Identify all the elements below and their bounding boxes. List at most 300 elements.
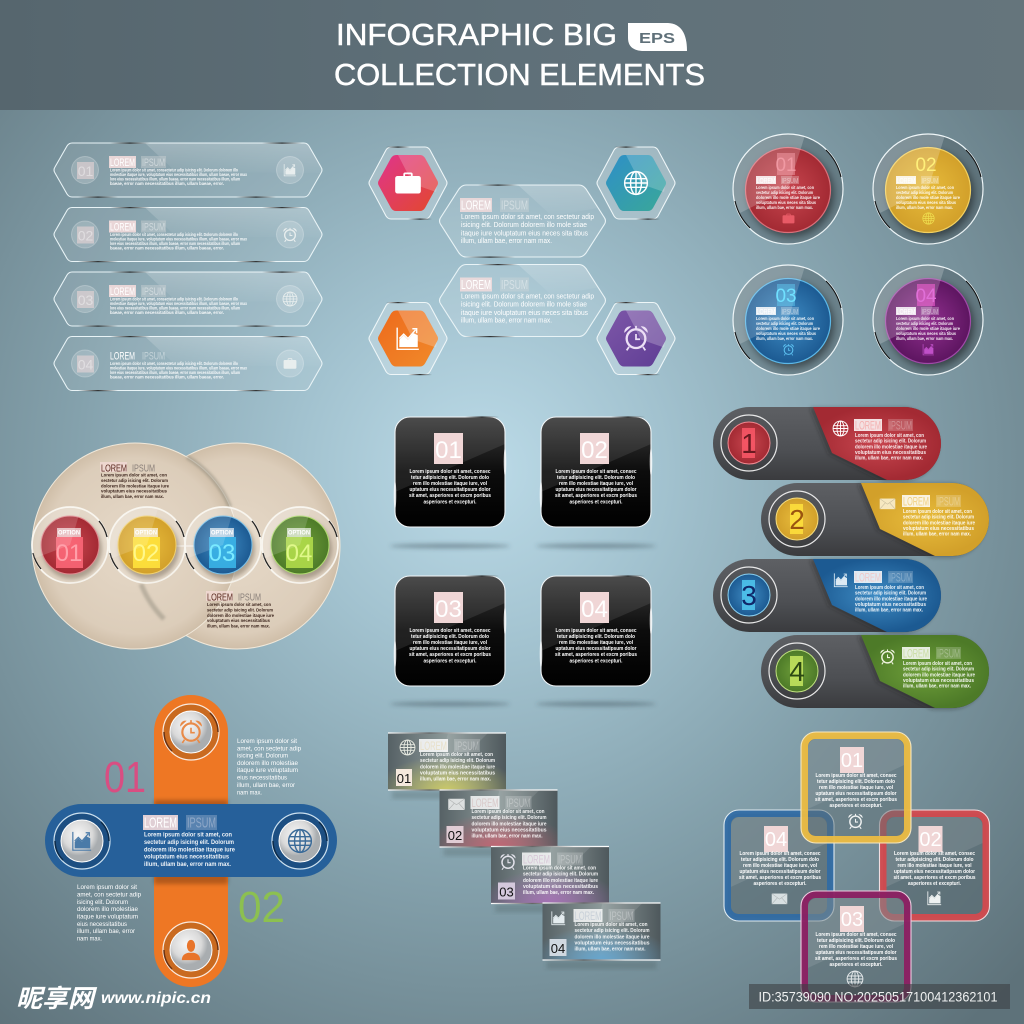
panel: hexagons [369,146,675,375]
frame 03 purple [801,891,911,1002]
pill 2 yellow: illum, ullam bae, error nam max. [903,532,972,538]
frame 04 blue: 04 [765,829,787,851]
disc text upper: LOREM [101,462,127,474]
strip 03: IPSUM [558,852,582,866]
strip 02: sectetur adip isicing elit. Dolorum [472,815,547,821]
frame 04 blue: asperiores et excepturi. [754,881,807,887]
card 01: Lorem ipsum dolor sit amet, consec [410,469,491,475]
glass bar 03: IPSUM [142,286,165,298]
disc text lower: dolorem illo molestiae itaque iure [207,613,274,619]
glass circle 03 blue: 03 [775,286,797,307]
number 01: 01 [104,753,146,802]
glass circle 03 blue: voluptatum eius neces sita tibus [756,331,816,337]
strip 04 [542,903,660,969]
frame 03 purple: sit amet, asperiores et excm poribus [815,956,897,962]
glass circle 01 red [728,129,843,244]
glass bar 02: molestiae itaque iure, voluptatum eius necessitatibus illum, ullam baeae, error max [110,236,247,242]
card 04: 04 [581,596,608,623]
option circle 04: OPTION [288,530,310,536]
text hexagon lower [440,264,606,337]
side text right: eius necessitatibus [237,774,288,782]
pill 1 red: voluptatum eius necessitatibus [855,450,926,456]
frame 01 yellow: rem illo molestiae itaque iure, vol [819,785,893,791]
side text right [237,738,301,796]
cross centre text: dolorem illo molestiae itaque iure [144,846,235,854]
text hexagon lower: IPSUM [501,277,528,292]
pill 4 green: illum, ullam bae, error nam max. [903,684,972,690]
strip 03: 03 [499,884,514,900]
glass bar 02: lore eius necessitatibus illum, ullam baeae, error nam necessitatibus illum, ullam [110,241,240,246]
glass circle 03 blue: IPSUM [782,307,798,316]
glass bar 04: 04 [78,356,93,372]
glass circle 03 blue: LOREM [756,307,776,316]
pill 3 blue [713,559,941,633]
glass bar 03: LOREM [110,286,135,298]
frame 03 purple: 03 [841,909,863,931]
pill 4 green: 4 [789,656,805,687]
frame 04 blue [724,810,834,921]
card 01 [394,416,506,527]
glass circle 01 red: sectetur adip isicing elit. Dolorum [756,190,813,196]
frame 01 yellow: uptatum eius necessitatipsum dolor [816,791,896,797]
glass circle 02 yellow [868,129,983,244]
glass circle 03 blue: illum, ullam bae, error nam max. [756,336,813,342]
glass circle 03 blue [728,260,843,375]
strip 02: illum, ullam bae, error nam max. [472,834,543,840]
cross centre text: sectetur adip isicing elit. Dolorum [144,839,234,846]
disc text lower [206,591,274,630]
button: bottom person [163,922,219,978]
text hexagon lower: illum, ullam bae, error nam max. [461,318,552,324]
frame 03 purple: asperiores et excepturi. [830,962,883,968]
pill 3 blue: sectetur adip isicing elit. Dolorum [855,590,926,596]
pill 2 yellow: dolorem illo molestiae itaque iure [903,520,975,526]
card 01: rem illo molestiae itaque iure, vol [413,481,487,487]
glass bar 01: Lorem ipsum dolor sit amet, consectetur adip isicing elit. Dolorum dolorem illo [110,168,238,172]
side text left: nam max. [77,936,102,942]
glass bar 02: LOREM [110,222,135,234]
side text left: illum, ullam bae, error [77,928,136,935]
frame 02 red: tetur adipisicing elit. Dolorum dolo [896,857,974,863]
strip 02: dolorem illo molestiae itaque iure [472,822,546,828]
option circle 03 [183,505,261,583]
card 03: asperiores et excepturi. [424,658,477,664]
side text left: Lorem ipsum dolor sit [77,884,137,891]
strip 02: LOREM [472,796,498,810]
frame 02 red: sit amet, asperiores et excm poribus [894,875,976,881]
card 04: tetur adipisicing elit. Dolorum dolo [557,634,636,640]
strip 04: LOREM [574,909,602,923]
glass bar 03: 03 [78,292,93,308]
orange vertical bar [154,695,228,987]
hexagon icon: chart [369,302,447,375]
glass bar 02: baeae, error nam necessitatibus illum, ullam baeae, error. [110,246,224,250]
glass bar 01: LOREM [110,157,135,169]
glass circle 03 blue: Lorem ipsum dolor sit amet, con [756,316,814,322]
card 02: sit amet, asperiores et excm poribus [555,493,637,499]
frame 04 blue: sit amet, asperiores et excm poribus [739,875,821,881]
disc right [134,443,340,649]
text hexagon upper: LOREM [461,198,491,212]
strip 03 [491,846,609,912]
disc text upper: IPSUM [132,462,155,474]
disc text upper [100,462,169,500]
glass circle 03 blue: dolorem illo mole stiae itaque iure [756,326,820,332]
panel: overlapping beige discs [30,443,340,649]
panel: glass bars [54,142,322,391]
pill 1 red: LOREM [855,420,881,432]
option circle 02: OPTION [135,530,157,536]
glass circle 04 purple: voluptatum eius neces sita tibus [896,331,956,337]
EPS badge [628,23,687,51]
option circle 03: 03 [209,540,235,567]
glass circle 04 purple: dolorem illo mole stiae itaque iure [896,326,960,332]
disc text upper: sectetur adip isicing elit. Dolorum [101,478,168,484]
text hexagon upper: itaque iure voluptatum eius neces sita tibus [461,230,588,238]
glass circle 01 red: dolorem illo mole stiae itaque iure [756,195,820,201]
glass circle 04 purple: sectetur adip isicing elit. Dolorum [896,321,953,327]
watermark id bar: ID:35739090 NO:20250517100412362101 [758,990,998,1004]
hexagon icon: globe [597,146,675,220]
frame 04 blue: uptatum eius necessitatipsum dolor [740,869,820,875]
card 02: tetur adipisicing elit. Dolorum dolo [557,475,636,481]
button: right globe [272,813,328,869]
cross centre text: LOREM [144,816,177,832]
strip 01: 01 [397,771,411,786]
card 01: uptatum eius necessitatipsum dolor [410,487,490,493]
pill 1 red: dolorem illo molestiae itaque iure [855,444,927,450]
button: top clock [163,704,219,760]
side text left: dolorem illo molestiae [77,906,138,913]
frame 02 red: asperiores et excepturi. [908,881,961,887]
disc left [32,443,238,649]
pill 1 red [713,407,941,481]
pill 4 green: IPSUM [937,648,960,660]
glass circle 04 purple: LOREM [896,307,916,316]
side text right: nam max. [237,790,262,796]
panel: glass circles [728,129,983,375]
pill 1 red: Lorem ipsum dolor sit amet, con [855,433,924,439]
frame 01 yellow: sit amet, asperiores et excm poribus [815,797,897,803]
glass circle 04 purple: IPSUM [922,307,938,316]
glass circle 04 purple: Lorem ipsum dolor sit amet, con [896,316,954,322]
frame 04 blue: rem illo molestiae itaque iure, vol [743,863,817,869]
card 03: Lorem ipsum dolor sit amet, consec [410,628,491,634]
blue bar shadow [154,800,228,884]
glass bar 04: lore eius necessitatibus illum, ullam baeae, error nam necessitatibus illum, ullam [110,370,240,375]
strip 02: IPSUM [506,796,530,810]
strip 04: IPSUM [610,909,634,923]
card 02: uptatum eius necessitatipsum dolor [556,487,636,493]
text hexagon upper: IPSUM [501,198,528,212]
pill 3 blue: illum, ullam bae, error nam max. [855,608,924,614]
frame 02 red: Lorem ipsum dolor sit amet, consec [894,851,975,857]
pill 4 green: voluptatum eius necessitatibus [903,678,974,684]
cross centre text: illum, ullam bae, error nam max. [144,861,231,868]
pill 1 red: IPSUM [889,420,912,432]
glass bar 04: IPSUM [142,350,165,362]
glass bar 04: molestiae itaque iure, voluptatum eius necessitatibus illum, ullam baeae, error max [110,366,247,370]
pill 2 yellow: voluptatum eius necessitatibus [903,526,974,532]
panel: stepped glass strips [388,733,660,969]
disc text upper: dolorem illo molestiae itaque iure [101,484,169,490]
disc text lower: IPSUM [238,592,261,604]
glass circle 04 purple: 04 [915,286,937,307]
panel: orange and blue cross [45,695,337,987]
pill 2 yellow: IPSUM [937,496,960,508]
card 02: asperiores et excepturi. [570,500,623,506]
frame 01 yellow: tetur adipisicing elit. Dolorum dolo [817,779,896,785]
strip 01: LOREM [420,739,447,753]
glass circle 02 yellow: Lorem ipsum dolor sit amet, con [896,185,954,191]
title: COLLECTION ELEMENTS [334,57,705,92]
frame 01 yellow: Lorem ipsum dolor sit amet, consec [816,773,897,779]
pill 2 yellow: LOREM [903,496,929,508]
card 03: uptatum eius necessitatipsum dolor [410,646,490,652]
frame 03 purple: uptatum eius necessitatipsum dolor [816,950,896,956]
pill 1 red: 1 [741,428,757,459]
glass bar 04: Lorem ipsum dolor sit amet, consectetur adip isicing elit. Dolorum dolorem illo [110,361,238,366]
glass circle 01 red: 01 [775,155,797,176]
frame 03 purple: rem illo molestiae itaque iure, vol [819,944,893,950]
option circle 01: 01 [56,540,82,567]
side text right: itaque iure voluptatum [237,767,298,774]
card 04: sit amet, asperiores et excm poribus [555,652,637,658]
glass bar 01: molestiae itaque iure, voluptatum eius necessitatibus illum, ullam baeae, error max [110,172,247,177]
glass circle 02 yellow: IPSUM [922,176,938,185]
strip 01: IPSUM [455,739,479,753]
overlap arc lower [141,584,164,619]
pill 3 blue: voluptatum eius necessitatibus [855,602,926,608]
card 03: tetur adipisicing elit. Dolorum dolo [411,634,490,640]
strip 01: Lorem ipsum dolor sit amet, con [420,752,494,758]
strip 01: dolorem illo molestiae itaque iure [420,764,495,770]
watermark logo: 昵享网 [16,985,98,1013]
card 04: asperiores et excepturi. [570,658,623,664]
side text left: eius necessitatibus [77,921,128,928]
frame 02 red [880,810,990,921]
option circle 02 [107,505,185,583]
pill 2 yellow [761,483,989,557]
card 04: rem illo molestiae itaque iure, vol [559,640,633,646]
pill 2 yellow: 2 [789,504,805,535]
pill 3 blue: dolorem illo molestiae itaque iure [855,596,927,602]
card 02: Lorem ipsum dolor sit amet, consec [556,469,637,475]
pill 3 blue: LOREM [855,572,881,584]
number 02: 02 [238,883,285,932]
option circle 02: 02 [133,540,159,567]
glass circle 01 red: IPSUM [782,176,798,185]
strip 04: dolorem illo molestiae itaque iure [574,934,650,940]
glass bar 01 [54,142,322,198]
frame 02 red: rem illo molestiae itaque iure, vol [898,863,972,869]
option circle 01: OPTION [58,530,80,536]
strip 02: Lorem ipsum dolor sit amet, con [472,809,545,815]
text hexagon upper [440,184,606,258]
disc text upper: illum, ullam bae, error nam max. [101,494,164,500]
card 02 [540,416,652,527]
glass circle 02 yellow: voluptatum eius neces sita tibus [896,200,956,206]
card 03 [394,575,506,686]
text hexagon upper: isicing elit. Dolorum dolorem illo mole stiae [461,222,587,229]
disc text lower: sectetur adip isicing elit. Dolorum [207,608,273,614]
frame 04 blue: Lorem ipsum dolor sit amet, consec [740,851,821,857]
title: INFOGRAPHIC BIG [336,17,617,52]
frame 02 red: 02 [919,829,942,851]
side text left: isicing elit. Dolorum [77,899,128,906]
EPS badge: EPS [639,30,675,47]
card 03: rem illo molestiae itaque iure, vol [413,640,487,646]
watermark logo [16,985,211,1013]
glass bar 02: IPSUM [142,222,165,234]
glass bar 03: Lorem ipsum dolor sit amet, consectetur adip isicing elit. Dolorum dolorem illo [110,296,238,302]
frame 03 purple: Lorem ipsum dolor sit amet, consec [816,932,897,938]
glass circle 02 yellow: illum, ullam bae, error nam max. [896,205,953,211]
side text right: amet, con sectetur adip [237,746,301,752]
overlap arc upper [187,457,230,507]
card 01: 01 [435,437,462,464]
connector line [176,546,194,547]
cross centre text: voluptatum eius necessitatibus [144,854,229,860]
text hexagon upper: illum, ullam bae, error nam max. [461,238,552,245]
disc text lower: Lorem ipsum dolor sit amet, con [207,602,271,608]
panel: number pills [713,407,989,709]
pill 3 blue: IPSUM [889,572,912,584]
pill 4 green: LOREM [903,648,929,660]
strip 02 [440,790,558,856]
card 03: 03 [435,596,462,623]
strip 04: 04 [551,941,565,956]
strip 01 [388,733,506,799]
pill 4 green [761,635,989,709]
hexagon icon: alarm clock [597,302,675,375]
watermark id bar [749,984,1010,1009]
option circle 04 [260,505,338,583]
strip 01: illum, ullam bae, error nam max. [420,776,491,782]
strip 02: 02 [448,828,462,843]
side text left [77,884,141,942]
glass bar 04 [54,336,322,391]
blue horizontal bar [45,804,337,877]
strip 04: Lorem ipsum dolor sit amet, con [574,922,648,928]
watermark logo: www.nipic.cn [101,990,211,1007]
panel: black cards [390,416,656,706]
card 03: sit amet, asperiores et excm poribus [409,652,491,658]
glass circle 02 yellow: sectetur adip isicing elit. Dolorum [896,190,953,196]
glass bar 03: lore eius necessitatibus illum, ullam baeae, error nam necessitatibus illum, ullam [110,306,240,310]
frame 01 yellow: asperiores et excepturi. [830,803,883,809]
pill 1 red: sectetur adip isicing elit. Dolorum [855,438,926,444]
strip 01: voluptatum eius necessitatibus [420,770,495,776]
glass bar 02: Lorem ipsum dolor sit amet, consectetur adip isicing elit. Dolorum dolorem illo [110,232,238,237]
glass circle 01 red: voluptatum eius neces sita tibus [756,200,816,206]
text hexagon lower: itaque iure voluptatum eius neces sita tibus [461,310,588,317]
strip 03: illum, ullam bae, error nam max. [523,890,594,896]
frame 04 blue: tetur adipisicing elit. Dolorum dolo [741,857,820,863]
text hexagon lower: isicing elit. Dolorum dolorem illo mole stiae [461,302,587,308]
glass bar 04: LOREM [110,350,135,362]
hexagon icon: briefcase [369,146,447,220]
glass bar 02 [54,207,322,262]
glass circle 01 red: Lorem ipsum dolor sit amet, con [756,185,814,191]
text hexagon lower: Lorem ipsum dolor sit amet, con sectetur adip [461,294,594,300]
card 01: tetur adipisicing elit. Dolorum dolo [411,475,490,481]
pill 4 green: Lorem ipsum dolor sit amet, con [903,661,972,667]
cross centre text: IPSUM [187,816,216,832]
glass circle 02 yellow: LOREM [896,176,916,185]
card 02: 02 [581,437,608,464]
card 01: sit amet, asperiores et excm poribus [409,493,491,499]
glass bar 01: IPSUM [142,157,165,169]
option circle 01 [30,505,108,583]
card shadows [390,544,656,706]
strip 01: sectetur adip isicing elit. Dolorum [420,758,495,764]
frame 01 yellow: 01 [841,750,863,772]
pill 2 yellow: Lorem ipsum dolor sit amet, con [903,509,972,515]
pill 4 green: sectetur adip isicing elit. Dolorum [903,666,974,672]
strip 04: illum, ullam bae, error nam max. [574,946,646,952]
text hexagon lower: LOREM [461,277,491,292]
option circle 03: OPTION [211,530,233,536]
glass bar 01: lore eius necessitatibus illum, ullam baeae, error nam necessitatibus illum, ullam [110,176,240,182]
strip 03: LOREM [523,852,550,866]
frame 01 yellow [801,732,911,843]
cross centre text: Lorem ipsum dolor sit amet, con [144,832,232,838]
frame 03 purple: tetur adipisicing elit. Dolorum dolo [817,938,896,944]
side text right: illum, ullam bae, error [237,782,296,789]
cross centre text [143,815,235,868]
button: left chart [54,813,110,869]
glass circle 03 blue: sectetur adip isicing elit. Dolorum [756,321,813,327]
glass bar 03 [54,272,322,327]
strip 03: Lorem ipsum dolor sit amet, con [523,866,597,872]
glass bar 02: 02 [78,228,93,244]
title [334,17,705,92]
pill 1 red: illum, ullam bae, error nam max. [855,456,924,462]
disc text upper: Lorem ipsum dolor sit amet, con [101,472,167,478]
title banner [0,0,1024,110]
side text left: amet, con sectetur adip [77,892,141,898]
strip 03: sectetur adip isicing elit. Dolorum [523,872,598,878]
card 02: rem illo molestiae itaque iure, vol [559,481,633,487]
side text right: isicing elit. Dolorum [237,752,288,760]
pill 3 blue: Lorem ipsum dolor sit amet, con [855,585,924,591]
side text right: Lorem ipsum dolor sit [237,738,297,745]
glass bar 01: 01 [78,163,93,179]
pill 4 green: dolorem illo molestiae itaque iure [903,672,975,678]
strip 04: sectetur adip isicing elit. Dolorum [574,928,650,934]
disc text lower: voluptatum eius necessitatibus [207,618,270,624]
pill 3 blue: 3 [741,580,757,611]
glass circle 02 yellow: dolorem illo mole stiae itaque iure [896,195,960,201]
glass circle 02 yellow: 02 [915,155,937,176]
glass circle 01 red: LOREM [756,176,776,185]
panel: overlapping frames [724,732,990,1002]
strip 02: voluptatum eius necessitatibus [472,828,546,834]
glass bar 01: baeae, error nam necessitatibus illum, ullam baeae, error. [110,181,224,186]
glass circle 01 red: illum, ullam bae, error nam max. [756,205,813,211]
disc text lower: LOREM [207,592,233,604]
side text left: itaque iure voluptatum [77,914,138,920]
disc text upper: voluptatum eius necessitatibus [101,488,167,494]
glass circle 04 purple: illum, ullam bae, error nam max. [896,336,953,342]
pill 2 yellow: sectetur adip isicing elit. Dolorum [903,514,974,520]
card 04: uptatum eius necessitatipsum dolor [556,646,636,652]
text hexagon upper: Lorem ipsum dolor sit amet, con sectetur adip [461,214,594,221]
side text right: dolorem illo molestiae [237,760,298,767]
card 04: Lorem ipsum dolor sit amet, consec [556,628,637,634]
option circle 04: 04 [286,540,312,567]
